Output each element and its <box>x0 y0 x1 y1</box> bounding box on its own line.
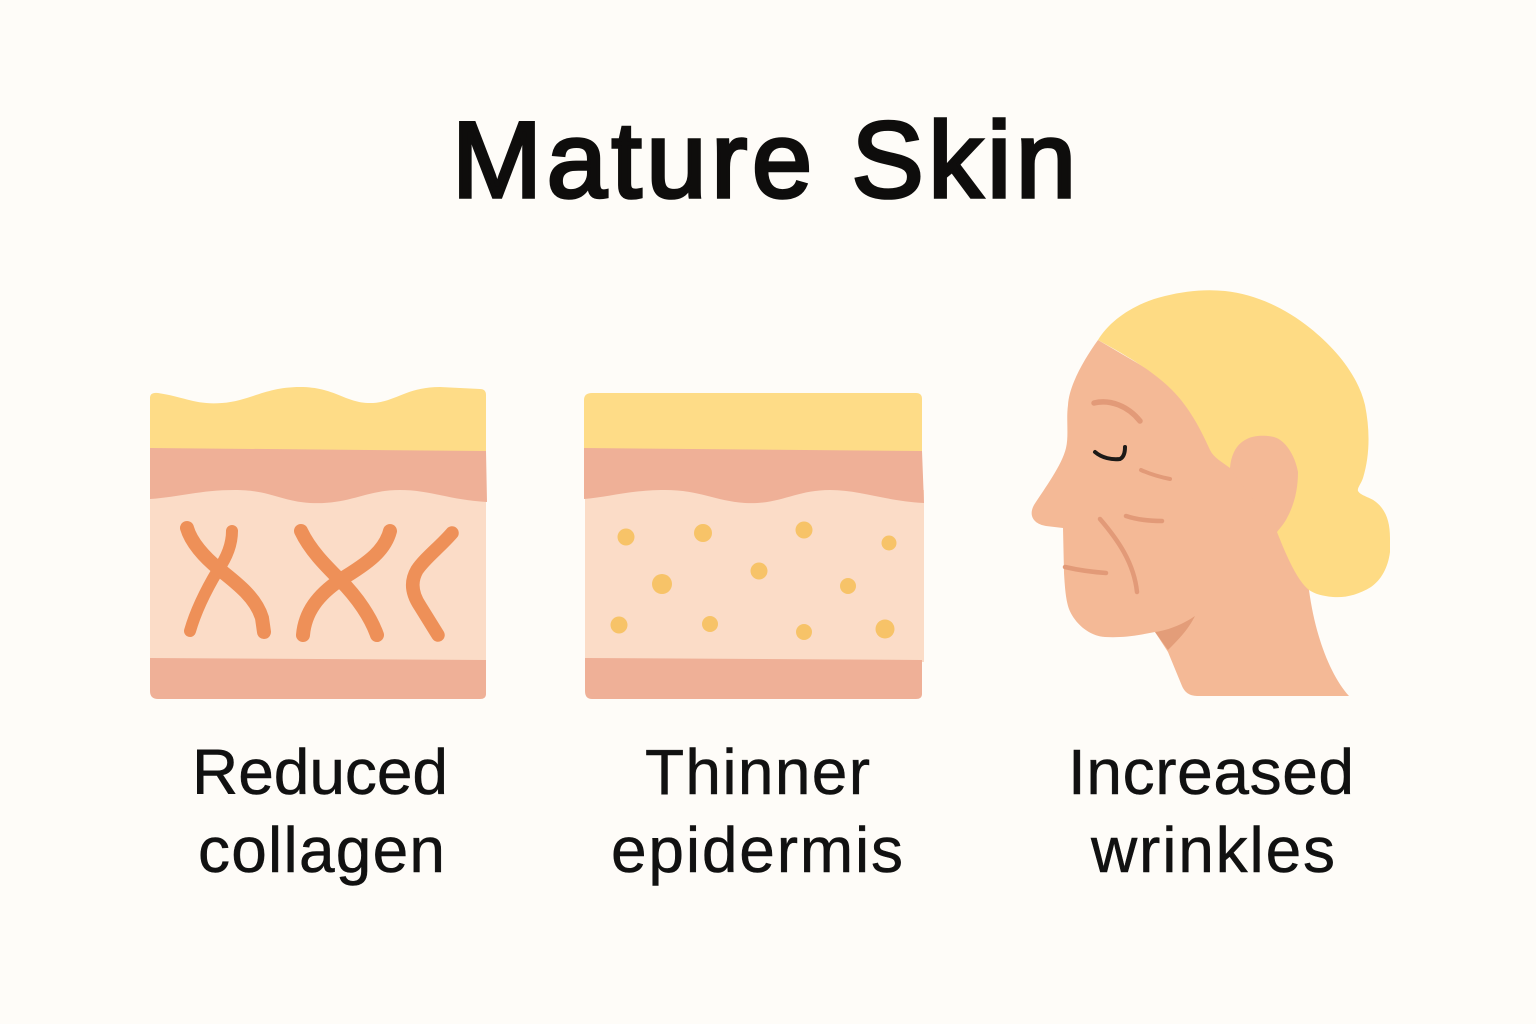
panel: reduced collagen skin diagram <box>150 387 487 699</box>
hair <box>1098 290 1390 597</box>
label: reduced collagen: Reduced <box>192 736 448 808</box>
face and neck <box>1032 340 1349 696</box>
panel: face profile with wrinkles <box>1032 290 1390 696</box>
label: thinner epidermis: Thinner <box>645 736 870 808</box>
pink band <box>584 448 924 503</box>
top yellow layer <box>150 387 486 455</box>
pale dermis layer <box>585 490 924 662</box>
closed eye <box>1095 447 1125 459</box>
label: reduced collagen: collagen <box>198 814 445 886</box>
wrinkles <box>1065 402 1170 592</box>
label: thinner epidermis: epidermis <box>611 814 903 886</box>
yellow dots <box>610 522 896 640</box>
label: increased wrinkles <box>1068 736 1354 886</box>
top yellow layer <box>584 393 922 455</box>
pink band <box>150 448 487 503</box>
ear <box>1230 436 1298 532</box>
label: thinner epidermis <box>611 736 903 886</box>
title: Mature Skin <box>452 99 1076 220</box>
chin shadow <box>1155 616 1195 650</box>
lower dermis pale layer <box>150 490 486 662</box>
label: increased wrinkles: Increased <box>1068 736 1354 808</box>
bottom band <box>585 658 922 699</box>
label: increased wrinkles: wrinkles <box>1090 814 1335 886</box>
collagen fibers <box>187 528 452 635</box>
bottom band <box>150 658 486 699</box>
panel: thinner epidermis skin diagram <box>584 393 924 699</box>
label: reduced collagen <box>192 736 448 886</box>
